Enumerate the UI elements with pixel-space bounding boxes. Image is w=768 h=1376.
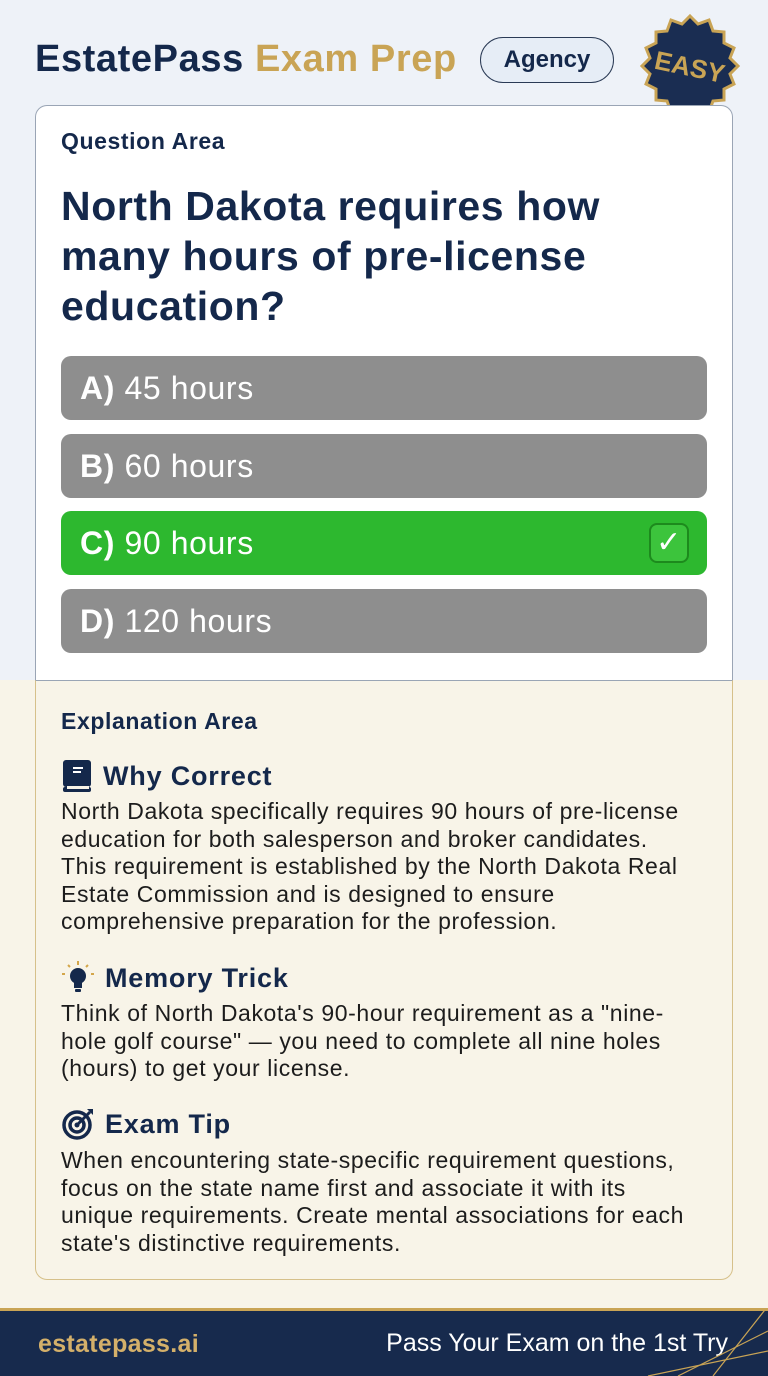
text: why correct: Estate Commission and is designed to ensure — [61, 880, 555, 906]
heading: Explanation Area: Explanation Area — [61, 708, 258, 734]
text: memory trick — [61, 1000, 664, 1081]
text: why correct: comprehensive preparation for the profession. — [61, 908, 557, 934]
question text — [61, 183, 600, 329]
footer brand: estatepass.ai — [38, 1330, 199, 1358]
panel: explanation — [35, 680, 733, 1280]
panel: question — [35, 105, 733, 681]
text: why correct: North Dakota specifically requires 90 hours of pre-license — [61, 798, 679, 824]
text: exam tip: focus on the state name first and associate it with its — [61, 1174, 626, 1200]
badge: EASY: EASY — [652, 45, 728, 89]
heading: Memory Trick: Memory Trick — [105, 962, 289, 992]
title: EstatePass Exam Prep — [35, 38, 457, 80]
bottom background — [0, 680, 768, 1310]
text: memory trick: hole golf course" — you need to complete all nine holes — [61, 1028, 661, 1054]
heading: Question Area: Question Area — [61, 128, 225, 154]
option A: A) 45 hours — [80, 370, 254, 406]
heading: Why Correct: Why Correct — [103, 760, 272, 790]
option C correct: ✓ — [656, 526, 682, 559]
badge: EASY — [640, 14, 740, 105]
text: why correct — [61, 798, 679, 934]
text: exam tip: When encountering state-specific requirement questions, — [61, 1147, 674, 1173]
option C correct: C) 90 hours — [80, 525, 254, 561]
tag: Agency: Agency — [504, 46, 590, 73]
question text: education? — [61, 283, 286, 329]
question text: North Dakota requires how — [61, 183, 600, 229]
option B: B) 60 hours — [80, 448, 254, 484]
heading: Exam Tip: Exam Tip — [105, 1108, 231, 1138]
footer tagline: Pass Your Exam on the 1st Try — [386, 1329, 728, 1357]
text: memory trick: Think of North Dakota's 90-hour requirement as a "nine- — [61, 1000, 664, 1026]
text: why correct: This requirement is established by the North Dakota Real — [61, 853, 678, 879]
option C correct — [61, 511, 707, 575]
text: exam tip — [61, 1147, 684, 1256]
text: exam tip: state's distinctive requirements. — [61, 1230, 401, 1256]
text: why correct: education for both salesperson and broker candidates. — [61, 826, 648, 852]
question text: many hours of pre-license — [61, 233, 586, 279]
footer — [0, 1308, 768, 1376]
text: exam tip: unique requirements. Create mental associations for each — [61, 1202, 684, 1228]
option A — [61, 356, 707, 420]
option D: D) 120 hours — [80, 603, 272, 639]
option D — [61, 589, 707, 653]
text: memory trick: (hours) to get your license. — [61, 1055, 350, 1081]
tag: Agency — [480, 37, 614, 83]
option B — [61, 434, 707, 498]
